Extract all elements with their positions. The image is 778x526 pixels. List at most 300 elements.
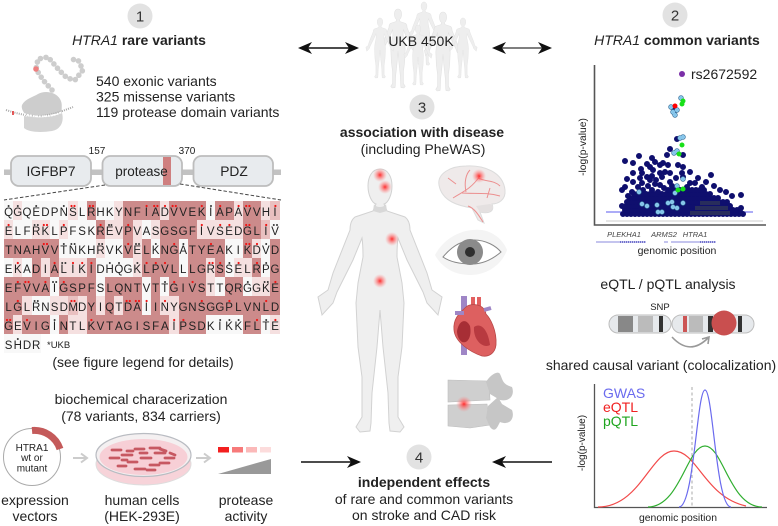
protease sequence alignment: G: [59, 283, 68, 295]
alignment footnote: *UKB: [47, 340, 70, 351]
protease sequence alignment: G: [179, 302, 188, 314]
chart legend: pQTL: [603, 413, 638, 429]
protease sequence alignment: L: [106, 283, 113, 295]
gene track: PLEKHA1: [607, 230, 641, 239]
protease sequence alignment: N: [252, 302, 261, 314]
arrow: cells to activity: [196, 454, 210, 462]
protease sequence alignment: N: [60, 321, 68, 333]
protease sequence alignment: V: [143, 283, 150, 295]
protease sequence alignment: R: [87, 207, 95, 219]
protease sequence alignment: V: [51, 245, 58, 257]
y axis label: -log(p-value): [578, 118, 589, 176]
protease sequence alignment: R: [32, 226, 40, 238]
text block: variant counts: [96, 73, 279, 120]
protease sequence alignment: K: [78, 264, 86, 276]
protease sequence alignment: D: [271, 302, 279, 314]
protease sequence alignment: L: [253, 226, 260, 238]
protease sequence alignment: D: [78, 302, 86, 314]
position labels: 157: [89, 146, 106, 157]
gene track: HTRA1: [683, 230, 707, 239]
y axis label: -log(p-value): [577, 415, 588, 471]
protease sequence alignment: S: [5, 340, 12, 352]
icon: heart: [454, 296, 496, 356]
dense navy association points: [622, 190, 745, 214]
protease sequence alignment: V: [244, 207, 251, 219]
protease sequence alignment: N: [41, 302, 50, 314]
protease sequence alignment: K: [87, 226, 95, 238]
protease sequence alignment: A: [23, 264, 31, 276]
lead variant legend: rs2672592: [691, 66, 757, 82]
protease sequence alignment: I: [273, 207, 277, 219]
icon: expression vector plasmid: mutant: [17, 464, 48, 474]
domain: IGFBP7: [11, 156, 91, 186]
x axis label: genomic position: [639, 513, 717, 524]
protease sequence alignment: G: [243, 226, 252, 238]
step badge 3: 3: [418, 100, 426, 116]
label: human cells: (HEK-293E): [104, 508, 180, 524]
protease sequence alignment: L: [244, 264, 251, 276]
protease sequence alignment: S: [216, 264, 224, 276]
protease sequence alignment: Y: [198, 245, 205, 257]
protease sequence alignment: G: [252, 283, 261, 295]
protease sequence alignment: L: [143, 245, 150, 257]
label: protease activity: [219, 492, 273, 524]
heading: association with disease: [340, 124, 504, 157]
protease sequence alignment: G: [41, 321, 50, 333]
step badge 1: 1: [136, 8, 144, 26]
protease sequence alignment: I: [237, 245, 240, 257]
heading: biochemical characterization: (78 variants, 834 carriers): [61, 408, 221, 424]
protease sequence alignment: V: [133, 226, 141, 238]
heading: HTRA1 common variants: HTRA1 common variants: [594, 32, 760, 48]
protease sequence alignment: S: [188, 321, 196, 333]
protease sequence alignment: V: [32, 283, 40, 295]
protease sequence alignment: D: [41, 207, 50, 219]
protease sequence alignment: P: [78, 283, 86, 295]
protease sequence alignment: A: [23, 245, 31, 257]
double arrow: rare variants to cohort: [298, 42, 359, 54]
protease sequence alignment: E: [5, 264, 12, 276]
protease sequence alignment: A: [115, 321, 123, 333]
protease sequence alignment: R: [96, 226, 105, 238]
protease sequence alignment: T: [216, 283, 223, 295]
protease sequence alignment: T: [106, 321, 113, 333]
curve: pQTL: [648, 446, 762, 507]
protease sequence alignment: D: [96, 264, 105, 276]
protease sequence alignment: I: [90, 264, 93, 276]
icon: ribosome translating protein chain: [6, 57, 83, 132]
protease sequence alignment: K: [87, 321, 95, 333]
protease sequence alignment: A: [42, 283, 49, 295]
protease sequence alignment: A: [216, 207, 224, 219]
domain: PDZ: PDZ: [220, 164, 248, 179]
protease sequence alignment: T: [207, 283, 214, 295]
protease sequence alignment: N: [161, 302, 169, 314]
protease sequence alignment: E: [106, 226, 113, 238]
protease sequence alignment: G: [271, 264, 280, 276]
protease sequence alignment: D: [124, 302, 132, 314]
protease sequence alignment: P: [152, 264, 159, 276]
step badge 2: 2: [671, 8, 679, 24]
protease sequence alignment: N: [60, 207, 68, 219]
protease sequence alignment: I: [71, 264, 74, 276]
chart legend: [603, 385, 645, 429]
protease sequence alignment: I: [44, 264, 47, 276]
protease sequence alignment: V: [23, 321, 31, 333]
step badge 1: [128, 4, 152, 28]
protease sequence alignment: P: [262, 264, 270, 276]
protease sequence alignment: N: [188, 302, 196, 314]
chromosome diagram: [609, 310, 754, 347]
protease sequence alignment: V: [23, 283, 31, 295]
step badge 3: [410, 94, 434, 120]
protease sequence alignment: A: [161, 321, 169, 333]
protease sequence alignment: L: [189, 264, 196, 276]
domain: PDZ: [194, 156, 273, 186]
light blue correlated points: [639, 98, 683, 212]
protease sequence alignment: F: [23, 226, 30, 238]
heading: shared causal variant: shared causal variant (colocalization): [546, 357, 776, 373]
protease sequence alignment: Q: [105, 302, 114, 314]
heading: independent effects: independent effects: [358, 474, 490, 490]
colocalization chart: [577, 384, 767, 524]
protease sequence alignment: R: [32, 340, 40, 352]
protease sequence alignment: K: [207, 321, 215, 333]
protease sequence alignment: V: [124, 245, 132, 257]
protease sequence alignment: E: [133, 245, 141, 257]
protease sequence alignment: T: [5, 245, 12, 257]
protease sequence alignment: T: [115, 302, 122, 314]
protease sequence alignment: I: [218, 321, 222, 333]
icon: brain: [439, 166, 505, 223]
protease sequence alignment: S: [69, 207, 77, 219]
label: expression vectors: expression: [1, 492, 69, 508]
protease sequence alignment: T: [134, 283, 141, 295]
label: expression vectors: vectors: [12, 508, 58, 524]
protease sequence alignment: Q: [114, 283, 123, 295]
text block: variant counts: 119 protease domain variants: [96, 104, 279, 120]
protease sequence alignment: V: [115, 226, 123, 238]
protease sequence alignment: Q: [225, 283, 234, 295]
protease sequence alignment: S: [152, 226, 159, 238]
heading: eQTL / pQTL analysis: eQTL / pQTL analysis: [600, 276, 736, 292]
protease sequence alignment: F: [14, 283, 21, 295]
protease sequence alignment: E: [225, 226, 233, 238]
protease sequence alignment: I: [200, 226, 203, 238]
protease sequence alignment: H: [32, 245, 40, 257]
label: human cells: [104, 492, 180, 524]
protease sequence alignment: A: [234, 207, 242, 219]
arrow: vectors to cells: [73, 454, 87, 462]
caption: see figure legend: (see figure legend for details): [52, 354, 234, 370]
protease sequence alignment: E: [271, 283, 279, 295]
protease sequence alignment: E: [32, 207, 40, 219]
protease sequence alignment: G: [4, 321, 13, 333]
protease sequence alignment: G: [13, 302, 22, 314]
protease sequence alignment: R: [252, 264, 261, 276]
protease sequence alignment: L: [235, 302, 241, 314]
protease sequence alignment: T: [152, 283, 159, 295]
icon: spine vertebrae: [448, 373, 513, 430]
protease sequence alignment: T: [161, 283, 168, 295]
chart legend: eQTL: [603, 399, 638, 415]
protease sequence alignment: G: [124, 321, 132, 333]
protease sequence alignment: D: [252, 245, 261, 257]
protease sequence alignment: Q: [4, 207, 13, 219]
protease sequence alignment: G: [13, 207, 22, 219]
green and red highlighted points: [678, 101, 683, 190]
protease sequence alignment: S: [170, 226, 178, 238]
protease sequence alignment: G: [243, 283, 252, 295]
protease sequence alignment: V: [244, 302, 251, 314]
icon: expression vector plasmid: HTRA1: [16, 443, 49, 454]
protease sequence alignment: D: [197, 321, 206, 333]
text block: variant counts: 325 missense variants: [96, 88, 235, 104]
protease sequence alignment: F: [244, 321, 251, 333]
protease sequence alignment: V: [262, 245, 270, 257]
protease sequence alignment: L: [5, 302, 12, 314]
protease sequence alignment: V: [271, 226, 279, 238]
protease sequence alignment: G: [160, 226, 169, 238]
protease sequence alignment: H: [96, 207, 105, 219]
protease sequence alignment: Q: [114, 264, 123, 276]
protease sequence alignment: I: [209, 207, 212, 219]
protease sequence alignment: A: [133, 302, 141, 314]
protease sequence alignment: P: [51, 207, 58, 219]
icon: expression vector plasmid: [4, 428, 60, 486]
protease sequence alignment: L: [180, 264, 186, 276]
protease sequence alignment: E: [234, 264, 242, 276]
protease sequence alignment: Y: [87, 302, 95, 314]
protease sequence alignment: K: [244, 245, 251, 257]
step badge 4: [406, 444, 432, 470]
heading: HTRA1 rare variants: HTRA1 rare variants: [72, 32, 206, 48]
protease sequence alignment: E: [207, 245, 215, 257]
protease sequence alignment: F: [152, 321, 159, 333]
protease sequence alignment: L: [171, 264, 177, 276]
protease sequence alignment: D: [271, 245, 279, 257]
protease sequence alignment: S: [78, 226, 86, 238]
protease sequence alignment: E: [5, 226, 12, 238]
heading: independent effects: of rare and common variants: [335, 491, 513, 507]
protease sequence alignment: A: [216, 245, 224, 257]
regional association plot: [578, 65, 766, 257]
protease sequence alignment: Y: [115, 207, 123, 219]
label: expression vectors: [1, 492, 69, 524]
protease sequence alignment: A: [179, 245, 187, 257]
protease sequence alignment: P: [179, 321, 187, 333]
protease sequence alignment: G: [197, 264, 206, 276]
heading: independent effects: on stroke and CAD risk: [352, 507, 497, 523]
protease sequence alignment: E: [14, 321, 22, 333]
label: human cells: human cells: [105, 492, 179, 508]
protease sequence alignment: L: [51, 226, 58, 238]
protease sequence alignment: G: [215, 302, 224, 314]
protease sequence alignment: F: [88, 283, 95, 295]
protease sequence alignment: H: [14, 340, 22, 352]
protease sequence alignment: H: [87, 245, 95, 257]
protease sequence alignment: L: [79, 207, 85, 219]
protease sequence alignment: V: [253, 207, 260, 219]
UKB cohort figures: [366, 2, 477, 91]
protease sequence alignment: E: [271, 321, 279, 333]
heading: biochemical characterization: [55, 391, 227, 424]
protease sequence alignment: K: [152, 245, 159, 257]
protease sequence alignment: K: [78, 245, 86, 257]
label: protease activity: protease: [219, 492, 273, 508]
heading: independent effects: [335, 474, 513, 523]
protease sequence alignment: T: [60, 245, 67, 257]
protease sequence alignment: D: [161, 207, 169, 219]
curve: GWAS: [679, 390, 731, 507]
protease sequence alignment: I: [145, 207, 148, 219]
text block: variant counts: 540 exonic variants: [96, 73, 217, 89]
protease sequence alignment: L: [61, 264, 67, 276]
step badge 4: 4: [415, 450, 423, 466]
icon: expression vector plasmid: wt or: [20, 453, 44, 464]
domain: IGFBP7: IGFBP7: [26, 164, 76, 179]
protease sequence alignment: S: [198, 302, 205, 314]
protease sequence alignment: I: [182, 283, 185, 295]
protease sequence alignment: G: [179, 226, 188, 238]
gene track: ARMS2: [650, 230, 678, 239]
protease sequence alignment: V: [42, 245, 49, 257]
protease sequence alignment: D: [234, 226, 242, 238]
protease sequence alignment: V: [179, 207, 187, 219]
protease sequence alignment: K: [225, 245, 233, 257]
protease sequence alignment: V: [188, 283, 196, 295]
protease sequence alignment: K: [14, 264, 22, 276]
protease sequence alignment: K: [42, 226, 49, 238]
protease sequence alignment: K: [115, 245, 123, 257]
protease sequence alignment: V: [170, 207, 178, 219]
protease sequence alignment: V: [207, 226, 215, 238]
protease sequence alignment: G: [169, 283, 178, 295]
protease sequence alignment: V: [161, 264, 169, 276]
gene track: [596, 230, 716, 242]
protease sequence alignment: P: [124, 226, 132, 238]
protease sequence alignment: L: [143, 264, 150, 276]
protease sequence alignment: L: [15, 226, 21, 238]
protease sequence alignment: I: [35, 321, 38, 333]
protease sequence alignment: F: [134, 207, 141, 219]
protease sequence alignment: G: [124, 264, 132, 276]
protease sequence alignment: K: [106, 207, 113, 219]
arrow: common to independent effects: [492, 456, 552, 468]
protease sequence alignment: Y: [170, 302, 178, 314]
protease sequence alignment: I: [53, 283, 56, 295]
protease sequence alignment: T: [69, 321, 76, 333]
protease sequence alignment: L: [24, 302, 30, 314]
protease sequence alignment: I: [264, 226, 267, 238]
chart legend: GWAS: [603, 385, 645, 401]
protease sequence alignment: Q: [22, 207, 31, 219]
x axis label: genomic position: [638, 245, 717, 257]
protease sequence alignment: T: [262, 321, 269, 333]
protease sequence alignment: V: [106, 245, 113, 257]
protease sequence alignment: D: [32, 264, 40, 276]
icon: eye: [435, 230, 507, 275]
protease sequence alignment: F: [69, 226, 76, 238]
protein domain diagram: [4, 146, 281, 200]
protease sequence alignment: R: [207, 264, 215, 276]
protease sequence alignment: P: [60, 226, 68, 238]
protease sequence alignment: A: [51, 264, 58, 276]
protease sequence alignment: N: [161, 245, 169, 257]
protease sequence alignment: L: [79, 321, 85, 333]
heading: association with disease: association with disease: [340, 124, 504, 140]
protease sequence alignment: K: [262, 283, 270, 295]
protease sequence alignment: I: [136, 321, 139, 333]
protease sequence alignment: K: [225, 321, 233, 333]
protease sequence alignment: R: [96, 245, 105, 257]
heading: association with disease: (including PheWAS): [361, 141, 485, 157]
icon: petri dish of human cells: [96, 434, 191, 485]
protease sequence alignment: A: [152, 207, 159, 219]
curve: eQTL: [598, 451, 746, 507]
protease activity bars and ramp: [218, 447, 271, 474]
protease sequence alignment: P: [225, 207, 233, 219]
protease sequence alignment: E: [188, 207, 196, 219]
protease sequence alignment: S: [69, 283, 77, 295]
protease sequence alignment: N: [14, 245, 22, 257]
protease sequence alignment: I: [154, 302, 157, 314]
position labels: [89, 146, 196, 157]
protease sequence alignment: F: [189, 226, 196, 238]
protease sequence alignment: G: [206, 302, 215, 314]
double arrow: cohort to common variants: [492, 42, 552, 54]
protease sequence alignment: H: [262, 207, 270, 219]
label: protease activity: activity: [225, 508, 267, 524]
protease sequence alignment: S: [216, 226, 224, 238]
label: SNP: SNP: [650, 302, 670, 313]
protease sequence alignment: D: [23, 340, 31, 352]
protease sequence alignment: S: [143, 321, 150, 333]
protease sequence alignment: T: [189, 245, 196, 257]
protease sequence alignment: K: [198, 207, 205, 219]
protease sequence alignment: S: [198, 283, 205, 295]
protease sequence alignment: [4, 201, 280, 352]
protease sequence alignment: A: [143, 226, 150, 238]
arrow: rare to independent effects: [301, 456, 361, 468]
protease sequence alignment: N: [124, 207, 132, 219]
protease sequence alignment: G: [169, 245, 178, 257]
protease sequence alignment: N: [124, 283, 132, 295]
protease sequence alignment: E: [5, 283, 12, 295]
protease sequence alignment: L: [263, 302, 269, 314]
protease sequence alignment: P: [225, 302, 233, 314]
protease sequence alignment: V: [97, 321, 104, 333]
protease sequence alignment: I: [53, 321, 56, 333]
protease sequence alignment: I: [145, 302, 148, 314]
protease sequence alignment: R: [32, 302, 40, 314]
domain: protease: [102, 156, 182, 186]
protease sequence alignment: N: [69, 245, 77, 257]
heading: biochemical characterization: biochemical characerization: [55, 391, 227, 407]
body figure with affected sites: [318, 168, 442, 432]
protease sequence alignment: K: [234, 321, 242, 333]
protease sequence alignment: L: [253, 321, 260, 333]
protease sequence alignment: D: [60, 302, 68, 314]
protease sequence alignment: K: [133, 264, 141, 276]
protease sequence alignment: R: [234, 283, 242, 295]
domain: protease: protease: [115, 164, 168, 179]
protease sequence alignment: I: [99, 302, 102, 314]
protease sequence alignment: I: [172, 321, 176, 333]
position labels: 370: [179, 146, 196, 157]
step badge 2: [662, 2, 688, 28]
label: UKB 450K: UKB 450K: [388, 33, 454, 49]
